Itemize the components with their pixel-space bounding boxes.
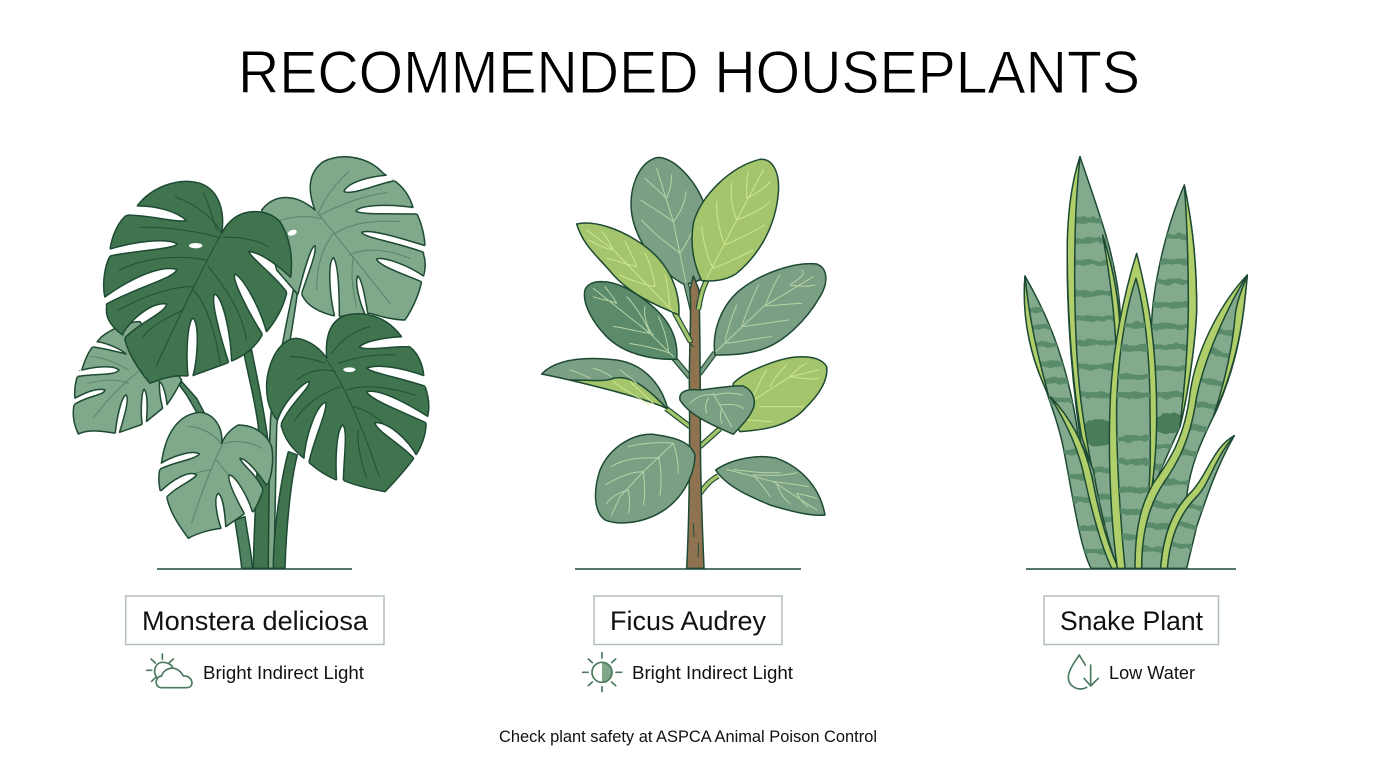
ground line — [1026, 568, 1236, 570]
leaf: right dark — [267, 314, 431, 492]
name label box: Monstera deliciosa — [142, 606, 369, 636]
footer note: Check plant safety at ASPCA Animal Poison Control — [499, 728, 877, 746]
leaf: upper right light — [262, 157, 428, 320]
leaf: large dark — [102, 181, 293, 383]
name label box — [126, 596, 384, 644]
leaf: top bright — [692, 159, 779, 281]
panel: Monstera deliciosa — [72, 157, 431, 688]
care row: water: Low Water — [1109, 662, 1195, 683]
name label box — [1044, 596, 1218, 644]
petioles and trunk — [666, 276, 720, 568]
blade: small front — [1161, 436, 1234, 568]
care row: light: Bright Indirect Light — [203, 662, 364, 683]
leaf: lower left light — [72, 322, 182, 436]
ground line — [575, 568, 801, 570]
icon: water drop with down arrow — [1068, 655, 1098, 689]
name label box — [594, 596, 782, 644]
leaf: small centre — [680, 386, 754, 434]
panel: Snake Plant — [1023, 157, 1247, 689]
leaf: lower right — [716, 457, 825, 515]
illustration: snake plant — [1023, 157, 1247, 568]
leaf: folded left — [542, 359, 668, 408]
care row: light — [147, 654, 364, 688]
care row: light — [583, 653, 793, 692]
leaf: lower left — [595, 434, 695, 523]
leaf: left bright — [577, 223, 679, 315]
stems — [179, 290, 297, 568]
care row: light: Bright Indirect Light — [632, 662, 793, 683]
leaf: bottom light — [158, 412, 273, 538]
ground line — [157, 568, 352, 570]
leaf: right grey — [714, 264, 826, 355]
blade: back right — [1151, 184, 1198, 482]
name label box: Snake Plant — [1060, 606, 1203, 636]
icon: sun behind cloud — [147, 654, 192, 688]
leaf: right bright — [730, 357, 827, 432]
illustration: ficus plant — [542, 157, 827, 568]
care row: water — [1068, 655, 1195, 689]
panel: Ficus Audrey — [542, 157, 827, 692]
leaf: left dark — [584, 282, 677, 359]
illustration: monstera plant — [72, 157, 431, 568]
leaf: top grey — [631, 157, 704, 285]
blade: right big — [1135, 275, 1247, 568]
name label box: Ficus Audrey — [610, 606, 766, 636]
title: RECOMMENDED HOUSEPLANTS — [238, 39, 1140, 106]
blade: centre — [1109, 253, 1157, 568]
icon: half sun — [583, 653, 622, 692]
blade: far left twisting — [1023, 276, 1120, 568]
blade: tall left — [1067, 157, 1123, 568]
